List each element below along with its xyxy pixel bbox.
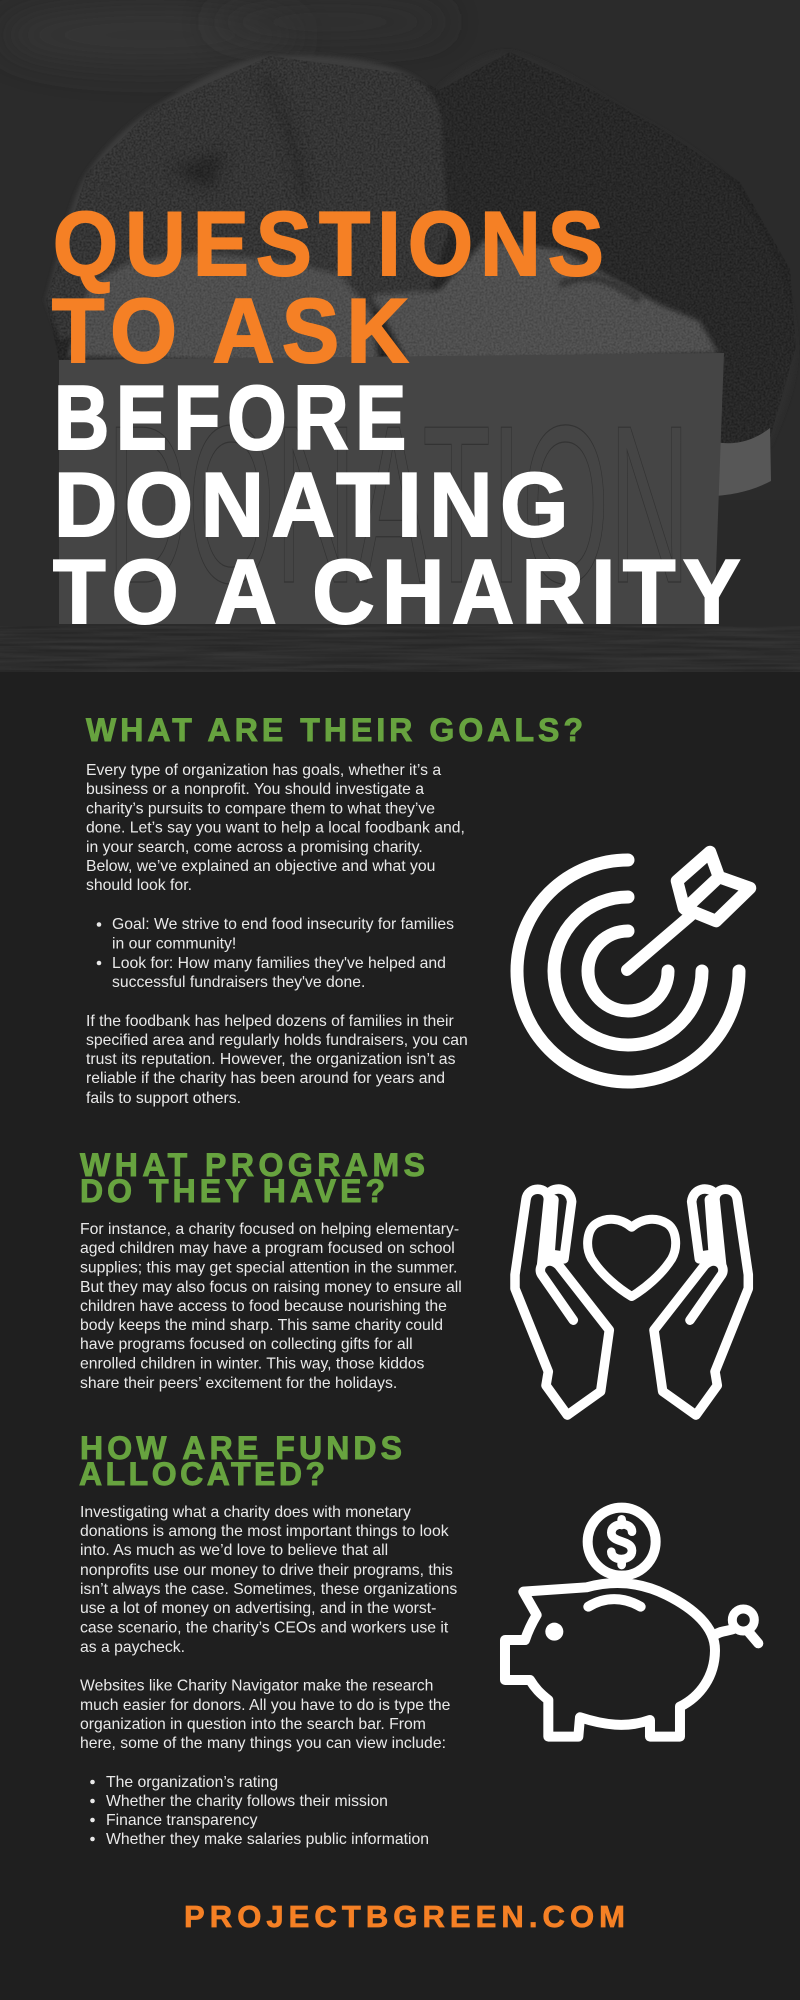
text block: funds body: case scenario, the charity’s CEOs and workers use it — [80, 1620, 449, 1637]
text block: programs body: share their peers’ excitement for the holidays. — [80, 1375, 397, 1392]
text block: goals conclusion: reliable if the charity has been around for years and — [86, 1070, 445, 1087]
heading: programs: DO THEY HAVE? — [80, 1173, 385, 1209]
text block: goals intro: business or a nonprofit. You should investigate a — [86, 781, 424, 798]
icon: target with arrow — [517, 852, 750, 1082]
text block: programs body: body keeps the mind sharp. This same charity could — [80, 1317, 443, 1334]
panel: goals — [86, 712, 750, 1107]
text block: goals intro: Every type of organization has goals, whether it’s a — [86, 762, 441, 779]
text block: goals intro: in your search, come across a promising charity. — [86, 839, 423, 856]
icon: hands holding heart — [515, 1189, 748, 1415]
bullet list: what to view: The organization’s rating — [106, 1774, 278, 1791]
panel: programs — [80, 1147, 748, 1415]
text block: funds body: as a paycheck. — [80, 1639, 185, 1656]
text block: charity navigator: here, some of the many things you can view include: — [80, 1735, 446, 1752]
text block: goals conclusion: If the foodbank has helped dozens of families in their — [86, 1013, 454, 1030]
text block: goals intro: done. Let’s say you want to help a local foodbank and, — [86, 820, 465, 837]
heading: funds: ALLOCATED? — [79, 1456, 325, 1492]
text block: goals conclusion: specified area and regularly holds fundraisers, you can — [86, 1032, 468, 1049]
text block: goals conclusion: fails to support others. — [86, 1090, 241, 1107]
title — [52, 194, 748, 643]
bullet list: what to view: Whether the charity follows their mission — [106, 1793, 388, 1810]
text block: goals intro — [86, 762, 465, 894]
bullet list: goal and look for: successful fundraisers they've done. — [112, 974, 365, 991]
text block: charity navigator: organization in question into the search bar. From — [80, 1716, 426, 1733]
text block: charity navigator: much easier for donors. All you have to do is type the — [80, 1697, 451, 1714]
text block: goals conclusion — [86, 1013, 468, 1107]
text block: funds body: isn’t always the case. Sometimes, these organizations — [80, 1581, 457, 1598]
heading: funds: HOW ARE FUNDS — [80, 1430, 402, 1466]
heading: programs: WHAT PROGRAMS — [80, 1147, 425, 1183]
panel: funds — [79, 1430, 758, 1848]
bullet list: goal and look for: Look for: How many families they've helped and — [112, 955, 446, 972]
text block: programs body: But they may also focus on raising money to ensure all — [80, 1279, 462, 1296]
text block: goals intro: charity’s pursuits to compare them to what they’ve — [86, 800, 435, 818]
title line: to a charity: TO A CHARITY — [53, 542, 748, 643]
text block: programs body — [80, 1221, 462, 1392]
text block: funds body — [80, 1504, 457, 1656]
heading: programs — [80, 1147, 425, 1209]
text block: programs body: For instance, a charity focused on helping elementary- — [80, 1221, 459, 1238]
title line: to ask: TO ASK — [52, 281, 416, 382]
text block: funds body: nonprofits use our money to drive their programs, this — [80, 1562, 453, 1579]
heading: funds — [79, 1430, 402, 1492]
text block: goals conclusion: trust its reputation. However, the organization isn’t as — [86, 1051, 456, 1068]
hero photo: donation box of sweaters — [0, 0, 800, 672]
text block: programs body: aged children may have a program focused on school — [80, 1240, 455, 1257]
text block: programs body: supplies; this may get special attention in the summer. — [80, 1260, 457, 1276]
title line: donating: DONATING — [54, 455, 576, 556]
text block: funds body: donations is among the most important things to look — [80, 1523, 449, 1540]
bullet list: what to view: Whether they make salaries public information — [106, 1831, 429, 1848]
bullet list: what to view — [90, 1774, 429, 1848]
title line: Questions: QUESTIONS — [53, 194, 611, 295]
icon: piggy bank with coin — [505, 1508, 758, 1737]
text block: goals intro: Below, we’ve explained an objective and what you — [86, 858, 435, 875]
text block: funds body: use a lot of money on advertising, and in the worst- — [80, 1600, 436, 1617]
text block: goals intro: should look for. — [86, 877, 192, 894]
text block: charity navigator — [80, 1678, 451, 1752]
footer url: PROJECTBGREEN.COM — [184, 1899, 625, 1934]
text block: programs body: children have access to food because nourishing the — [80, 1298, 447, 1315]
bullet list: what to view: Finance transparency — [106, 1812, 258, 1829]
bullet list: goal and look for: in our community! — [112, 936, 236, 952]
text block: charity navigator: Websites like Charity Navigator make the research — [80, 1678, 433, 1695]
title line: before: BEFORE — [54, 368, 413, 469]
bullet list: goal and look for: Goal: We strive to end food insecurity for families — [112, 916, 454, 933]
text block: programs body: have programs focused on collecting gifts for all — [80, 1336, 413, 1353]
text block: funds body: Investigating what a charity does with monetary — [80, 1504, 411, 1521]
heading: goals: WHAT ARE THEIR GOALS? — [86, 712, 583, 748]
text block: programs body: enrolled children in winter. This way, those kiddos — [80, 1356, 424, 1373]
bullet list: goal and look for — [97, 916, 454, 991]
text block: funds body: into. As much as we’d love to believe that all — [80, 1542, 388, 1559]
